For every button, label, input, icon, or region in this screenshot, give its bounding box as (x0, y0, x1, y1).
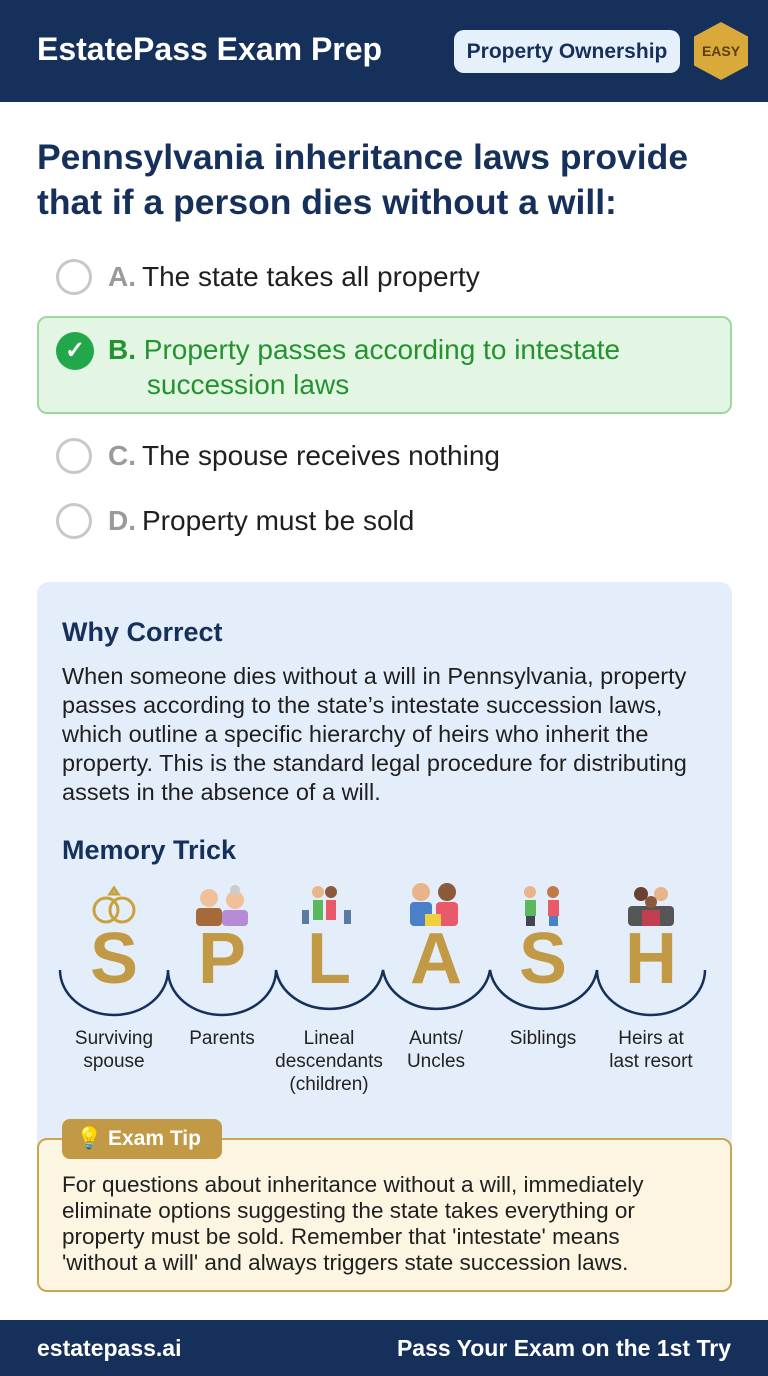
option B text: succession laws (147, 369, 349, 400)
option C (56, 438, 500, 474)
labels: spouse (83, 1051, 145, 1072)
brand title: EstatePass Exam Prep (37, 31, 382, 67)
text: explanation (62, 663, 687, 805)
text: C.The spouse receives nothing (108, 440, 500, 471)
footer url: estatepass.ai (37, 1335, 181, 1361)
text: Lineal (304, 1028, 354, 1049)
text: Parents (189, 1028, 255, 1049)
text: (children) (289, 1074, 369, 1095)
text: tip: eliminate options suggesting the state takes everything or (62, 1198, 635, 1223)
text: explanation: property. This is the standard legal procedure for distributing (62, 750, 687, 776)
text: tip: property must be sold. Remember that 'intestate' means (62, 1224, 620, 1249)
difficulty badge: EASY (702, 43, 740, 59)
text: explanation: which outline a specific hierarchy of heirs who inherit the (62, 721, 648, 747)
labels: Surviving (75, 1028, 153, 1049)
panel: explanation (37, 582, 732, 1292)
mnemonic SPLASH (58, 883, 706, 1016)
icon: heirs group (628, 887, 674, 926)
category pill (454, 30, 680, 73)
text: last resort (609, 1051, 693, 1072)
option A (56, 259, 480, 295)
option B correct (37, 316, 732, 414)
footer (0, 1320, 768, 1376)
text: L (307, 919, 351, 999)
icon: siblings (524, 886, 559, 926)
difficulty badge (694, 22, 748, 80)
tip tab (62, 1119, 222, 1159)
question: that if a person dies without a will: (37, 182, 617, 222)
panel: exam tip (37, 1138, 732, 1292)
heading: memory trick: Memory Trick (62, 835, 236, 865)
letters: S (90, 919, 138, 999)
text: descendants (275, 1051, 383, 1072)
text: S (519, 919, 567, 999)
text: explanation: passes according to the state’s intestate succession laws, (62, 692, 662, 718)
text: Siblings (510, 1028, 576, 1049)
header bar (0, 0, 768, 102)
text: D.Property must be sold (108, 505, 414, 536)
option B text (108, 334, 620, 400)
icon: family (302, 886, 351, 924)
arcs (60, 970, 705, 1015)
icon: check (56, 332, 94, 370)
option D (56, 503, 414, 539)
text: explanation: When someone dies without a will in Pennsylvania, property (62, 663, 686, 689)
icon: aunts uncles (410, 883, 458, 926)
text: tip (62, 1172, 644, 1275)
text: explanation: assets in the absence of a will. (62, 779, 381, 805)
icon: check: ✓ (65, 337, 85, 364)
heading: why correct: Why Correct (62, 617, 223, 647)
text: A.The state takes all property (108, 261, 480, 292)
icon: parents (196, 885, 248, 926)
text: Uncles (407, 1051, 465, 1072)
text: tip: For questions about inheritance without a will, immediately (62, 1172, 644, 1197)
text: Aunts/ (409, 1028, 463, 1049)
text: Heirs at (618, 1028, 684, 1049)
text: tip: 'without a will' and always triggers state succession laws. (62, 1250, 628, 1275)
labels (75, 1028, 153, 1072)
text: H (625, 919, 677, 999)
category pill: Property Ownership (467, 40, 667, 63)
text: P (198, 919, 246, 999)
text: A (410, 919, 462, 999)
tip tab: 💡 Exam Tip (76, 1127, 201, 1150)
question: Pennsylvania inheritance laws provide (37, 137, 688, 177)
footer slogan: Pass Your Exam on the 1st Try (397, 1335, 731, 1361)
icon: rings (94, 888, 134, 922)
option B text: B. Property passes according to intestate (108, 334, 620, 365)
question (37, 137, 688, 222)
